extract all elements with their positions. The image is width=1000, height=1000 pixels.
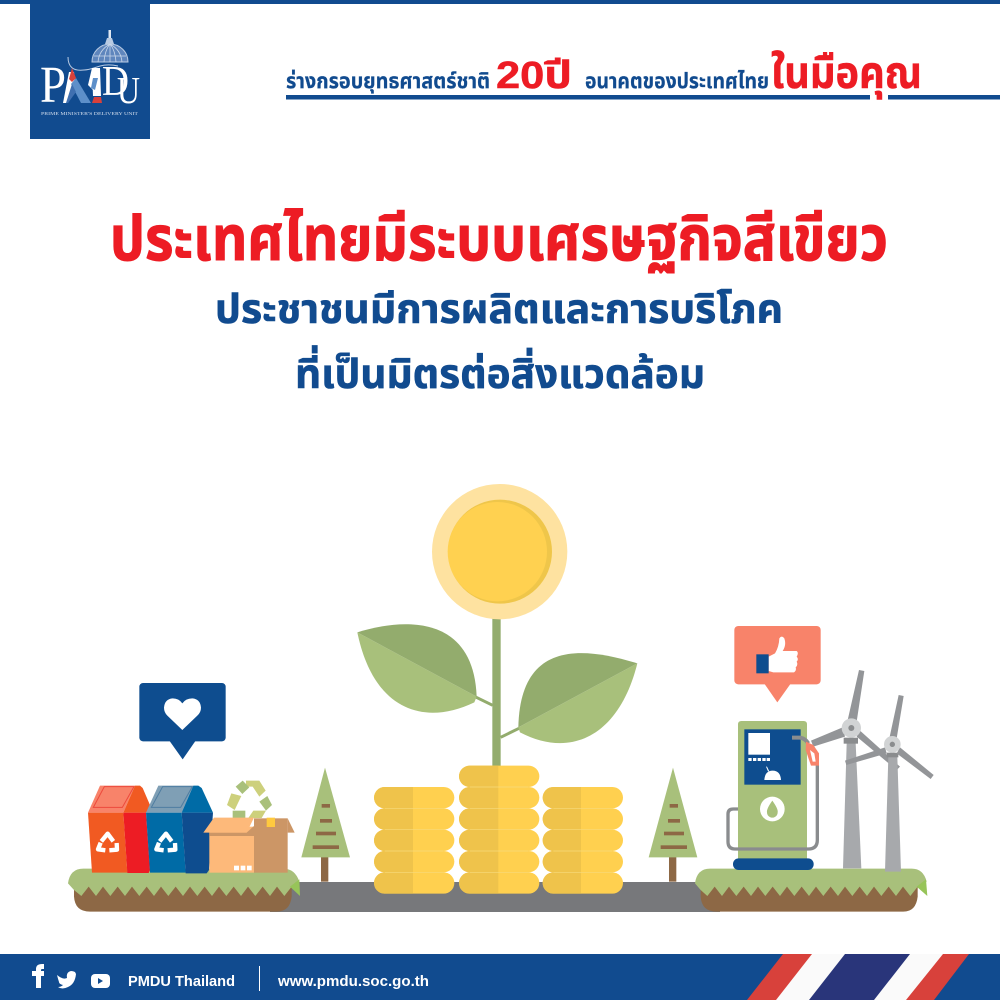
right tree (649, 768, 697, 882)
coin stack centre (459, 766, 539, 894)
tree (301, 768, 350, 882)
orange recycling bin (88, 786, 151, 873)
logo: PMDU: D (102, 59, 129, 105)
logo caption: PRIME MINISTER'S DELIVERY UNIT (41, 111, 138, 116)
subtitle: ที่เป็นมิตรต่อสิ่งแวดล้อม (295, 345, 705, 397)
header slogan: ในมือคุณ (771, 49, 922, 100)
heart speech bubble (139, 683, 226, 759)
icon: youtube (91, 974, 110, 988)
recycle symbol (156, 834, 175, 850)
coin flower (432, 484, 567, 619)
grass island (68, 869, 300, 912)
header slogan: อนาคตของประเทศไทย (585, 70, 769, 93)
subtitle: ประชาชนมีการผลิตและการบริโภค (215, 286, 783, 332)
cardboard box (203, 818, 295, 873)
footer (0, 954, 1000, 1000)
header underline (286, 95, 1000, 100)
header slogan: 20ปี (496, 55, 572, 97)
grass island (695, 869, 927, 912)
footer url: www.pmdu.soc.go.th (277, 973, 429, 990)
recycle symbol (98, 834, 117, 850)
fuel pump (728, 721, 819, 870)
coin stack right (543, 787, 623, 894)
logo: PMDU: U (117, 70, 140, 112)
left leaf (357, 624, 493, 713)
icon: facebook (32, 964, 44, 988)
stem (492, 617, 501, 767)
flag stripes (747, 954, 969, 1000)
subtitle (215, 286, 783, 397)
thumbs-up speech bubble (734, 626, 821, 702)
blue recycling bin (146, 786, 213, 873)
logo swoosh (68, 57, 118, 70)
top bar (0, 0, 1000, 4)
header slogan: ร่างกรอบยุทธศาสตร์ชาติ (286, 70, 490, 94)
left scene: recycling (68, 683, 350, 912)
header slogan (286, 49, 922, 100)
wind turbine large (811, 670, 900, 868)
footer label: PMDU Thailand (128, 973, 235, 990)
logo letters: P (40, 57, 66, 114)
coin stack left (374, 787, 454, 894)
main title: ประเทศไทยมีระบบเศรษฐกิจสีเขียว (110, 205, 888, 274)
right leaf (501, 653, 637, 743)
icon: twitter (57, 971, 76, 988)
wind turbine small (845, 695, 934, 872)
road (270, 882, 720, 912)
recycle sign above box (227, 781, 272, 818)
logo: PMDU (30, 4, 150, 139)
centre scene: coin plant (357, 484, 637, 894)
right scene: clean energy (695, 626, 934, 912)
logo dome (92, 30, 128, 62)
